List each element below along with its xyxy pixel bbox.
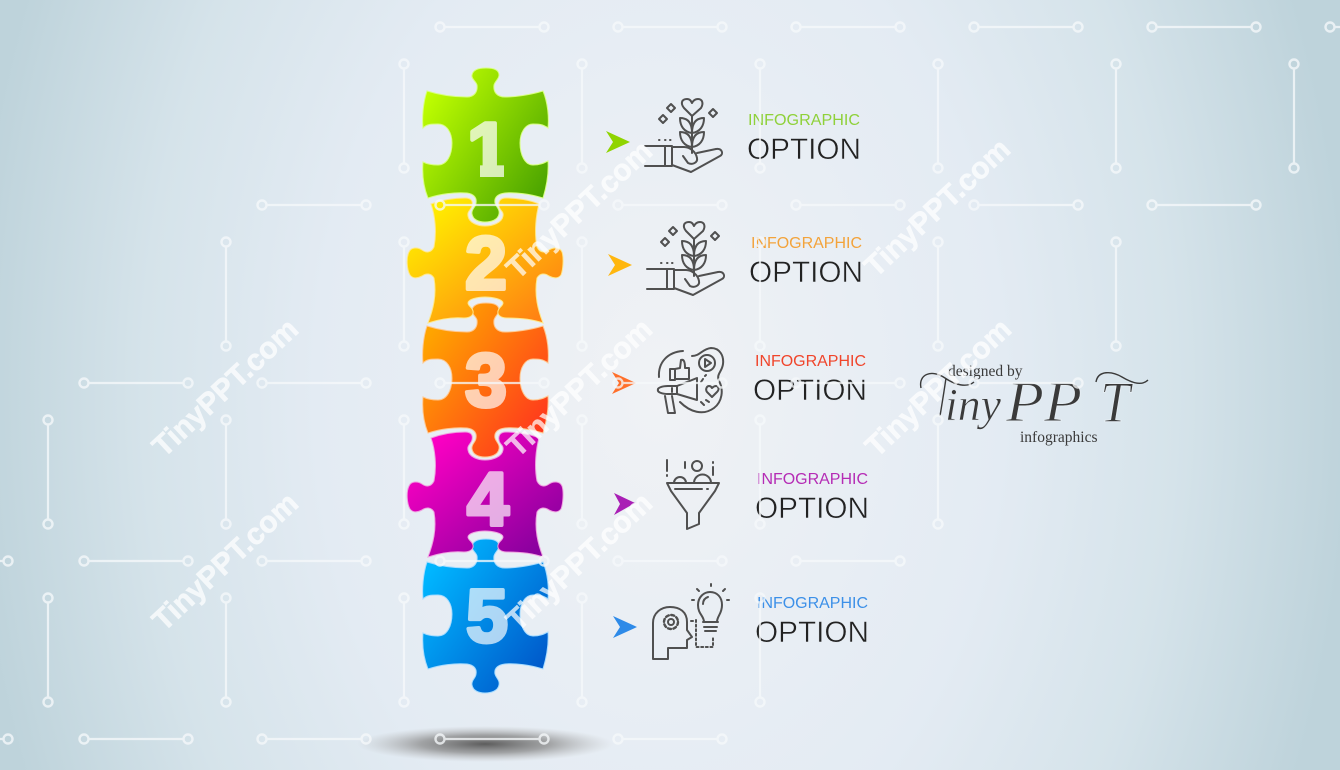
puzzle piece 5: 5	[466, 574, 508, 658]
text block: option 5	[755, 595, 869, 649]
text block: option 1: OPTION	[747, 133, 861, 166]
puzzle piece 3: 3	[465, 338, 507, 422]
arrow 5	[613, 616, 637, 638]
watermarks: TinyPPT.com: TinyPPT.com	[500, 313, 659, 464]
text block: option 1	[747, 112, 861, 166]
watermarks: TinyPPT.com: TinyPPT.com	[146, 313, 305, 464]
logo: designed by TinyPPT infographics: infographics	[1020, 429, 1097, 446]
watermarks: TinyPPT.com: TinyPPT.com	[146, 487, 305, 638]
logo: designed by TinyPPT infographics: T	[1100, 370, 1133, 435]
text block: option 3: OPTION	[753, 374, 867, 407]
puzzle piece 1	[423, 68, 548, 222]
puzzle piece 2: 2	[465, 221, 507, 305]
watermarks: TinyPPT.com	[146, 133, 1018, 638]
text block: option 5: INFOGRAPHIC	[757, 595, 868, 612]
puzzle piece 4: 4	[467, 457, 509, 541]
puzzle piece 2	[407, 198, 563, 323]
text block: option 4: INFOGRAPHIC	[757, 471, 868, 488]
text block: option 3	[753, 353, 867, 407]
arrow 3	[612, 372, 636, 394]
icon: head with light bulb	[653, 584, 729, 659]
watermarks: TinyPPT.com: TinyPPT.com	[500, 487, 659, 638]
logo: designed by TinyPPT infographics: iny	[945, 379, 1002, 430]
watermarks: TinyPPT.com: TinyPPT.com	[500, 135, 659, 286]
text block: option 4: OPTION	[755, 492, 869, 525]
icon: plant in hand 2	[647, 222, 724, 295]
puzzle piece 1: 1	[467, 107, 509, 191]
text block: option 2: INFOGRAPHIC	[751, 235, 862, 252]
logo: designed by TinyPPT infographics	[921, 363, 1148, 446]
panel: puzzle column	[407, 68, 563, 693]
text block: option 5: OPTION	[755, 616, 869, 649]
text block: option 1: INFOGRAPHIC	[748, 112, 860, 129]
arrow 2	[608, 254, 632, 276]
watermarks: TinyPPT.com: TinyPPT.com	[858, 133, 1017, 284]
arrow 4	[614, 493, 635, 515]
logo: designed by TinyPPT infographics: designed by	[948, 363, 1023, 380]
puzzle piece 5	[423, 539, 548, 693]
arrow 1	[606, 131, 630, 153]
watermarks: TinyPPT.com: TinyPPT.com	[859, 313, 1018, 464]
text block: option 4	[755, 471, 869, 525]
text block: option 2: OPTION	[749, 256, 863, 289]
puzzle piece 3	[423, 303, 548, 457]
icon: funnel	[667, 460, 719, 529]
text block: option 3: INFOGRAPHIC	[755, 353, 866, 370]
icon: plant in hand 1	[645, 99, 722, 172]
icon: megaphone and social	[658, 348, 723, 413]
text block: option 2	[749, 235, 863, 289]
floor shadow	[357, 726, 613, 762]
logo: designed by TinyPPT infographics: PP	[1005, 369, 1082, 434]
puzzle piece 4	[407, 432, 563, 557]
